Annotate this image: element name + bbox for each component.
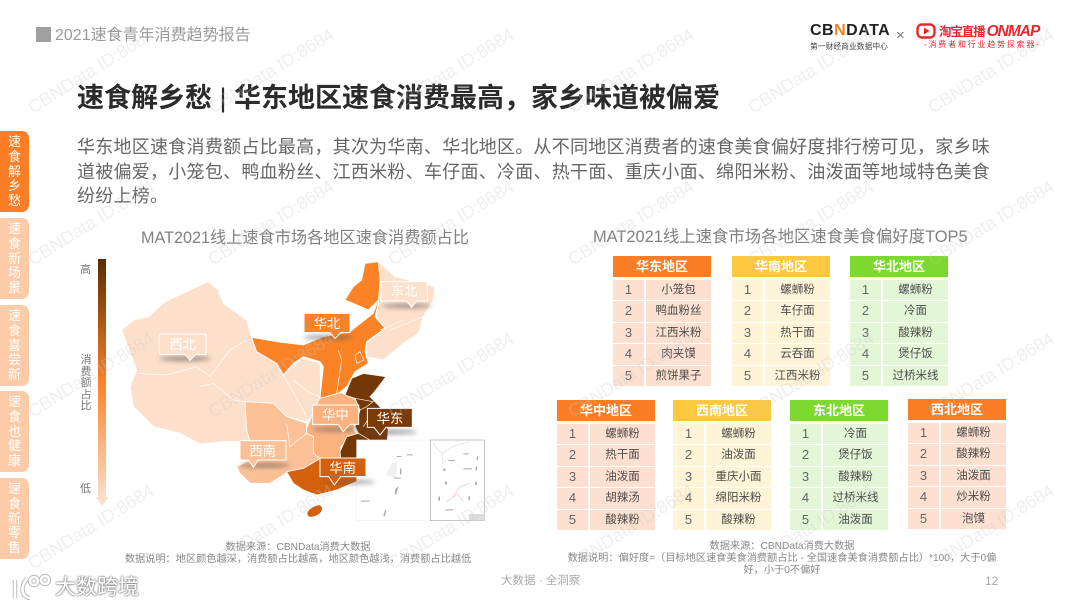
CBNData logo: CBNDATA <box>810 22 890 39</box>
table: Central China: 热干面 <box>605 449 640 461</box>
legend low label: 低 <box>80 483 91 495</box>
tab: new tastes <box>0 305 29 386</box>
table: East China <box>613 256 711 386</box>
tab: new retail: 新 <box>8 511 21 526</box>
table: Northwest: 3 <box>920 468 927 483</box>
table: Northeast: 过桥米线 <box>832 492 878 504</box>
repeated ID watermark: CBNData ID:8684 <box>205 176 337 269</box>
tab: new tastes: 速 <box>8 308 21 323</box>
table: Northeast: 2 <box>802 447 809 462</box>
table: North China: 2 <box>862 303 869 318</box>
table: Southwest: 5 <box>685 512 692 527</box>
table: Southwest: 2 <box>685 447 692 462</box>
callout: 华中: 华中 <box>322 407 349 422</box>
table: East China: 4 <box>625 346 632 361</box>
table: Northwest: 螺蛳粉 <box>956 427 991 439</box>
intro paragraph: 纷纷上榜。 <box>77 186 168 206</box>
table: South China: 车仔面 <box>780 305 815 317</box>
table: Central China: 螺蛳粉 <box>605 428 640 440</box>
table: North China: 3 <box>862 325 869 340</box>
tab: active: 速 <box>8 134 21 149</box>
repeated ID watermark: CBNData ID:8684 <box>205 328 337 421</box>
table: East China: 5 <box>625 368 632 383</box>
repeated ID watermark: CBNData ID:8684 <box>205 24 337 117</box>
table: East China: 3 <box>625 325 632 340</box>
tab: healthy: 食 <box>8 409 21 424</box>
CBNData logo: 第一财经商业数据中心 <box>810 42 888 51</box>
Taobao Live ONMAP logo: -消费者和行业趋势探索器- <box>924 40 1041 49</box>
table: Northeast: 酸辣粉 <box>838 471 873 483</box>
table: South China: 1 <box>744 282 751 297</box>
title: 速食解乡愁 | 华东地区速食消费最高，家乡味道被偏爱 <box>77 83 720 113</box>
repeated ID watermark: CBNData ID:8684 <box>205 480 337 573</box>
preference source note: 数据来源：CBNData消费大数据 <box>710 541 854 552</box>
table: North China: 1 <box>862 282 869 297</box>
repeated ID watermark: CBNData ID:8684 <box>385 24 517 117</box>
table: North China: 酸辣粉 <box>898 327 933 339</box>
table: South China <box>732 256 830 386</box>
table: Northwest: 泡馍 <box>962 513 985 525</box>
table: Southwest <box>673 400 771 530</box>
callout: 华中 <box>312 405 362 432</box>
repeated ID watermark: CBNData ID:8684 <box>925 24 1057 117</box>
brand name: 大数跨境 <box>55 576 139 599</box>
icon: brand mark <box>12 574 52 600</box>
map source note: 数据来源：CBNData消费大数据 <box>226 542 370 553</box>
map source note <box>125 541 471 565</box>
table: Central China: 油泼面 <box>605 471 640 483</box>
repeated ID watermark: CBNData ID:8684 <box>925 480 1057 573</box>
repeated ID watermark: CBNData ID:8684 <box>565 176 697 269</box>
tab: new retail: 速 <box>8 481 21 496</box>
repeated ID watermark: CBNData ID:8684 <box>745 480 877 573</box>
table: South China: 2 <box>744 303 751 318</box>
Taobao Live ONMAP logo <box>916 23 1041 49</box>
map source note: 数据说明：地区颜色越深，消费额占比越高，地区颜色越浅，消费额占比越低 <box>125 554 471 565</box>
tab: new retail: 售 <box>8 540 21 555</box>
table: Northwest: 西北地区 <box>931 402 983 417</box>
table: Southwest: 3 <box>685 469 692 484</box>
times sign: × <box>896 27 905 44</box>
inset maps <box>357 440 484 521</box>
repeated ID watermark: CBNData ID:8684 <box>25 328 157 421</box>
table: East China: 1 <box>625 282 632 297</box>
table: Northwest: 酸辣粉 <box>956 448 991 460</box>
source brand watermark <box>12 574 140 600</box>
region: east <box>340 373 388 473</box>
callout: 华东: 华东 <box>377 411 403 426</box>
repeated ID watermark: CBNData ID:8684 <box>565 328 697 421</box>
table: Southwest: 绵阳米粉 <box>716 492 762 504</box>
legend high label: 高 <box>80 264 91 276</box>
table: Northwest: 1 <box>920 425 927 440</box>
repeated ID watermark: CBNData ID:8684 <box>925 176 1057 269</box>
table: Central China: 4 <box>569 490 576 505</box>
table: South China: 4 <box>744 346 751 361</box>
tab: new scenes: 景 <box>8 280 21 295</box>
tab: healthy <box>0 391 29 472</box>
region: north <box>252 262 385 398</box>
table: Central China: 胡辣汤 <box>605 492 640 504</box>
tab: healthy: 也 <box>8 424 21 439</box>
table: Central China: 5 <box>569 512 576 527</box>
repeated ID watermark: CBNData ID:8684 <box>25 24 157 117</box>
callout: 东北 <box>381 282 432 308</box>
tab: new tastes: 食 <box>8 323 21 338</box>
table: East China: 肉夹馍 <box>661 348 696 360</box>
repeated ID watermark: CBNData ID:8684 <box>385 328 517 421</box>
colour legend <box>80 259 109 506</box>
region: central <box>307 392 360 459</box>
repeated ID watermark: CBNData ID:8684 <box>745 328 877 421</box>
region: northwest <box>122 282 321 444</box>
table: South China: 热干面 <box>780 327 815 339</box>
table: Northeast: 东北地区 <box>813 403 865 418</box>
repeated ID watermark: CBNData ID:8684 <box>565 24 697 117</box>
table: Central China: 1 <box>569 426 576 441</box>
callout: 东北: 东北 <box>391 284 417 299</box>
table: Northeast: 4 <box>802 490 809 505</box>
table: Northeast: 3 <box>802 469 809 484</box>
tab: active <box>0 131 29 212</box>
callout: 西北 <box>159 334 211 361</box>
intro paragraph: 华东地区速食消费额占比最高，其次为华南、华北地区。从不同地区消费者的速食美食偏好度排行榜可见，家乡味 <box>77 137 990 157</box>
side navigation tabs <box>0 131 29 559</box>
intro paragraph <box>77 137 990 206</box>
table: Northwest: 2 <box>920 446 927 461</box>
table: Central China: 2 <box>569 447 576 462</box>
region: south <box>287 459 372 495</box>
callout: 华东 <box>366 408 418 435</box>
table: Northeast: 1 <box>802 426 809 441</box>
map chart heading: MAT2021线上速食市场各地区速食消费额占比 <box>141 229 469 247</box>
repeated ID watermark: CBNData ID:8684 <box>745 24 877 117</box>
tab: new retail <box>0 478 29 559</box>
region: Hainan <box>307 505 322 517</box>
table: Central China: 酸辣粉 <box>605 514 640 526</box>
tab: healthy: 健 <box>8 438 21 453</box>
tab: new scenes: 速 <box>8 221 21 236</box>
table: North China: 5 <box>862 368 869 383</box>
tab: active: 乡 <box>8 178 21 193</box>
table: Central China <box>557 400 655 530</box>
header text: 2021速食青年消费趋势报告 <box>55 27 251 44</box>
preference source note: 数据说明：偏好度=（目标地区速食美食消费额占比 - 全国速食美食消费额占比）*100，大于0偏 <box>568 553 996 564</box>
table: North China: 华北地区 <box>873 259 925 274</box>
table: East China: 小笼包 <box>661 284 696 296</box>
table: South China: 华南地区 <box>755 259 807 274</box>
tab: healthy: 康 <box>8 453 21 468</box>
tab: new scenes: 新 <box>8 251 21 266</box>
table: North China: 过桥米线 <box>892 370 938 382</box>
table: Central China: 3 <box>569 469 576 484</box>
table: North China: 冷面 <box>904 305 927 317</box>
table: Northwest: 炒米粉 <box>956 491 991 503</box>
table: East China: 鸭血粉丝 <box>656 305 702 317</box>
tab: new scenes: 食 <box>8 236 21 251</box>
inset: South China Sea <box>430 440 484 521</box>
Taobao Live ONMAP logo: 淘宝直播ONMAP <box>939 23 1039 40</box>
table: Southwest: 酸辣粉 <box>721 514 756 526</box>
table: North China <box>850 256 948 386</box>
page number: 12 <box>985 574 998 588</box>
table: Northwest: 4 <box>920 489 927 504</box>
tab: new scenes: 场 <box>8 265 21 280</box>
repeated ID watermark: CBNData ID:8684 <box>745 176 877 269</box>
table: East China: 2 <box>625 303 632 318</box>
region: northeast <box>367 262 435 360</box>
tab: active: 解 <box>8 164 21 179</box>
table: South China: 江西米粉 <box>774 370 820 382</box>
repeated ID watermark: CBNData ID:8684 <box>25 480 157 573</box>
table: Southwest: 4 <box>685 490 692 505</box>
callout: 西北: 西北 <box>169 337 196 352</box>
table: Northeast: 煲仔饭 <box>838 449 873 461</box>
table: North China: 螺蛳粉 <box>898 284 933 296</box>
tab: new scenes <box>0 218 29 299</box>
legend gradient arrow <box>96 259 109 506</box>
table: Southwest: 螺蛳粉 <box>721 428 756 440</box>
legend axis label: 消费额占比 <box>80 354 92 412</box>
table: Southwest: 油泼面 <box>721 449 756 461</box>
callout: 西南: 西南 <box>249 443 276 458</box>
inset: Taiwan strait <box>357 440 430 521</box>
tab: new retail: 零 <box>8 525 21 540</box>
callout: 华北: 华北 <box>314 316 340 331</box>
tab: new tastes: 新 <box>8 367 21 382</box>
tab: active: 愁 <box>8 193 21 208</box>
tab: healthy: 速 <box>8 394 21 409</box>
table: Northeast: 5 <box>802 512 809 527</box>
table: North China: 煲仔饭 <box>898 348 933 360</box>
region: southwest <box>237 402 341 483</box>
table: East China: 华东地区 <box>636 259 688 274</box>
table: Southwest: 重庆小面 <box>716 471 762 483</box>
preference source note: 好，小于0不偏好 <box>744 565 820 576</box>
callout: 华北 <box>303 313 353 340</box>
table: Central China: 华中地区 <box>580 403 632 418</box>
repeated ID watermark: CBNData ID:8684 <box>565 480 697 573</box>
table: South China: 5 <box>744 368 751 383</box>
CBNData logo <box>810 22 890 51</box>
tab: new tastes: 喜 <box>8 338 21 353</box>
table: Northwest: 油泼面 <box>956 470 991 482</box>
header square marker <box>36 27 51 42</box>
icon: play button <box>916 23 936 39</box>
preference chart heading: MAT2021线上速食市场各地区速食美食偏好度TOP5 <box>593 228 968 246</box>
table: Northwest: 5 <box>920 511 927 526</box>
intro paragraph: 道被偏爱，小笼包、鸭血粉丝、江西米粉、车仔面、冷面、热干面、重庆小面、绵阳米粉、油泼面等地域特色美食 <box>77 162 990 182</box>
repeated ID watermark: CBNData ID:8684 <box>925 328 1057 421</box>
callout: 华南 <box>320 458 375 485</box>
table: Northeast <box>790 400 888 530</box>
table: East China: 煎饼果子 <box>656 370 702 382</box>
table: North China: 4 <box>862 346 869 361</box>
footer tagline: 大数据 · 全洞察 <box>501 575 580 587</box>
table: Northeast: 油泼面 <box>838 514 873 526</box>
tab: active: 食 <box>8 149 21 164</box>
repeated ID watermark: CBNData ID:8684 <box>385 176 517 269</box>
table: Southwest: 西南地区 <box>696 403 748 418</box>
callout: 华南: 华南 <box>329 460 356 475</box>
report header <box>36 26 251 44</box>
tab: new tastes: 尝 <box>8 352 21 367</box>
table: Northwest <box>908 399 1006 529</box>
table: Southwest: 1 <box>685 426 692 441</box>
table: South China: 螺蛳粉 <box>780 284 815 296</box>
table: Northeast: 冷面 <box>844 428 867 440</box>
table: South China: 云吞面 <box>780 348 815 360</box>
repeated ID watermark: CBNData ID:8684 <box>385 480 517 573</box>
callout: 西南 <box>240 441 290 468</box>
repeated ID watermark: CBNData ID:8684 <box>25 176 157 269</box>
preference source note <box>568 540 996 576</box>
tab: new retail: 食 <box>8 496 21 511</box>
table: East China: 江西米粉 <box>656 327 702 339</box>
table: South China: 3 <box>744 325 751 340</box>
logos <box>810 22 1041 51</box>
map of China by region <box>122 262 485 521</box>
